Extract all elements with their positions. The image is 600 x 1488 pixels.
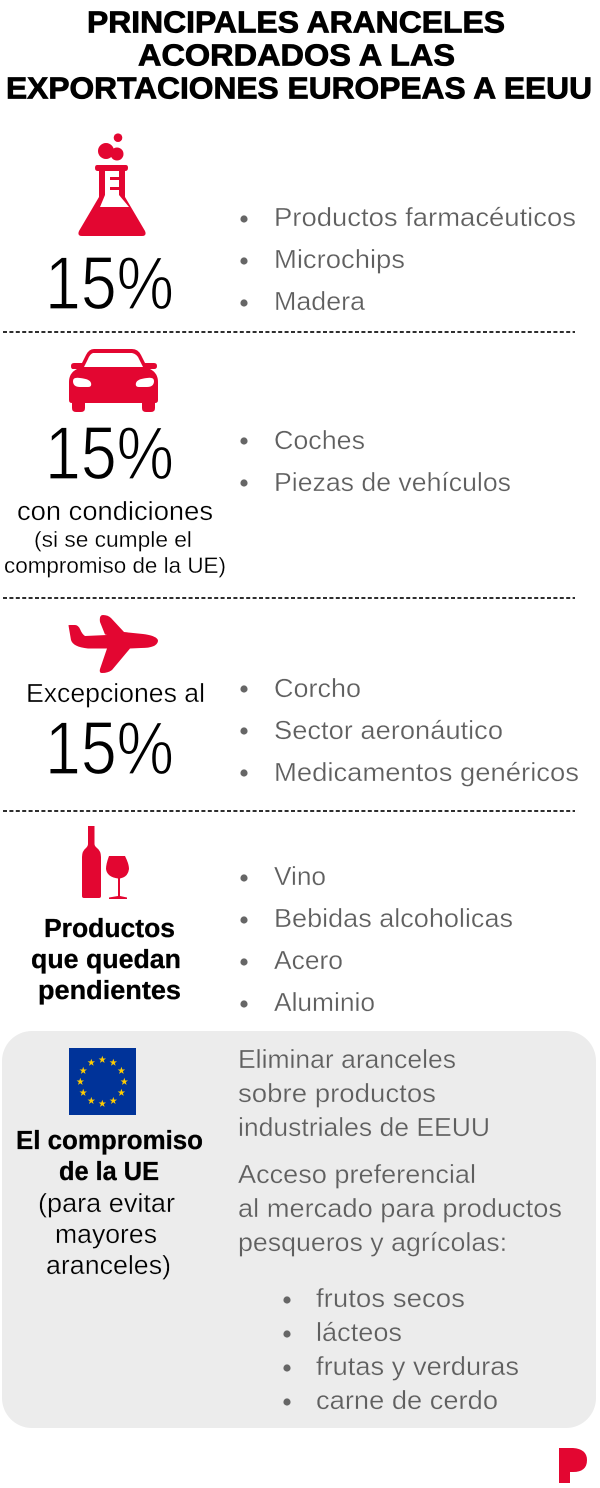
list: pending products: Vino [274,861,326,891]
list: agricultural products: lácteos [316,1317,402,1347]
title: PRINCIPALES ARANCELES [87,6,505,40]
list: exceptions: Medicamentos genéricos [274,757,579,787]
text: acceso preferencial: Acceso preferencial [238,1159,476,1189]
label: excepciones: Excepciones al [26,680,205,708]
logo: P [559,1448,587,1483]
list: agricultural products: frutos secos [316,1283,465,1313]
label: el compromiso de la UE [16,1127,203,1280]
panel: 15% general [45,133,576,325]
list: exceptions: Corcho [274,673,361,703]
label: el compromiso de la UE: mayores [55,1221,157,1249]
list: exceptions [240,673,579,787]
list: exceptions: Sector aeronáutico [274,715,503,745]
panel: el compromiso de la UE [2,1031,596,1428]
icon: airplane [68,615,158,673]
list: pending products [240,861,513,1017]
list: pending products: Aluminio [274,987,375,1017]
text: eliminar aranceles: sobre productos [238,1078,436,1108]
text: eliminar aranceles: Eliminar aranceles [238,1044,456,1074]
list: vehicles [240,425,511,497]
percentage 15%: 15% [45,241,174,325]
condition note: con condiciones [17,498,213,526]
list: pending products: Acero [274,945,343,975]
text: eliminar aranceles: industriales de EEUU [238,1112,490,1142]
panel: 15% con condiciones [4,349,511,578]
icon: car [69,349,158,412]
condition note [4,498,226,578]
condition note: compromiso de la UE) [4,553,226,578]
label: productos que quedan pendientes [31,915,181,1005]
text: acceso preferencial: pesqueros y agrícolas: [238,1227,507,1257]
panel: pendientes [31,826,513,1017]
percentage 15%: 15% [45,706,174,790]
list: pending products: Bebidas alcoholicas [274,903,513,933]
icon: EU flag [69,1048,136,1115]
label: el compromiso de la UE: de la UE [59,1158,159,1186]
label: productos que quedan pendientes: pendientes [38,977,181,1005]
title: ACORDADOS A LAS [138,38,455,72]
text: acceso preferencial: al mercado para productos [238,1193,562,1223]
list: vehicles: Piezas de vehículos [274,467,511,497]
icon: flask [78,133,146,236]
text: acceso preferencial [238,1159,562,1257]
list: products at 15%: Madera [274,286,366,316]
list: agricultural products: carne de cerdo [316,1385,498,1415]
percentage 15%: 15% [45,411,174,495]
list: vehicles: Coches [274,425,365,455]
list: products at 15%: Microchips [274,244,405,274]
label: el compromiso de la UE: aranceles) [46,1252,171,1280]
list: agricultural products [283,1283,519,1415]
title [6,6,592,106]
list: products at 15%: Productos farmacéuticos [274,202,576,232]
label: el compromiso de la UE: (para evitar [38,1190,176,1218]
condition note: (si se cumple el [34,527,192,552]
list: products at 15% [240,202,576,316]
list: agricultural products: frutas y verduras [316,1351,519,1381]
label: el compromiso de la UE: El compromiso [16,1127,203,1155]
label: productos que quedan pendientes: que quedan [31,946,181,974]
label: productos que quedan pendientes: Productos [44,915,175,943]
panel: excepciones [26,615,579,790]
icon: wine bottle and glass [82,826,129,899]
title: EXPORTACIONES EUROPEAS A EEUU [6,72,592,106]
text: eliminar aranceles [238,1044,490,1142]
